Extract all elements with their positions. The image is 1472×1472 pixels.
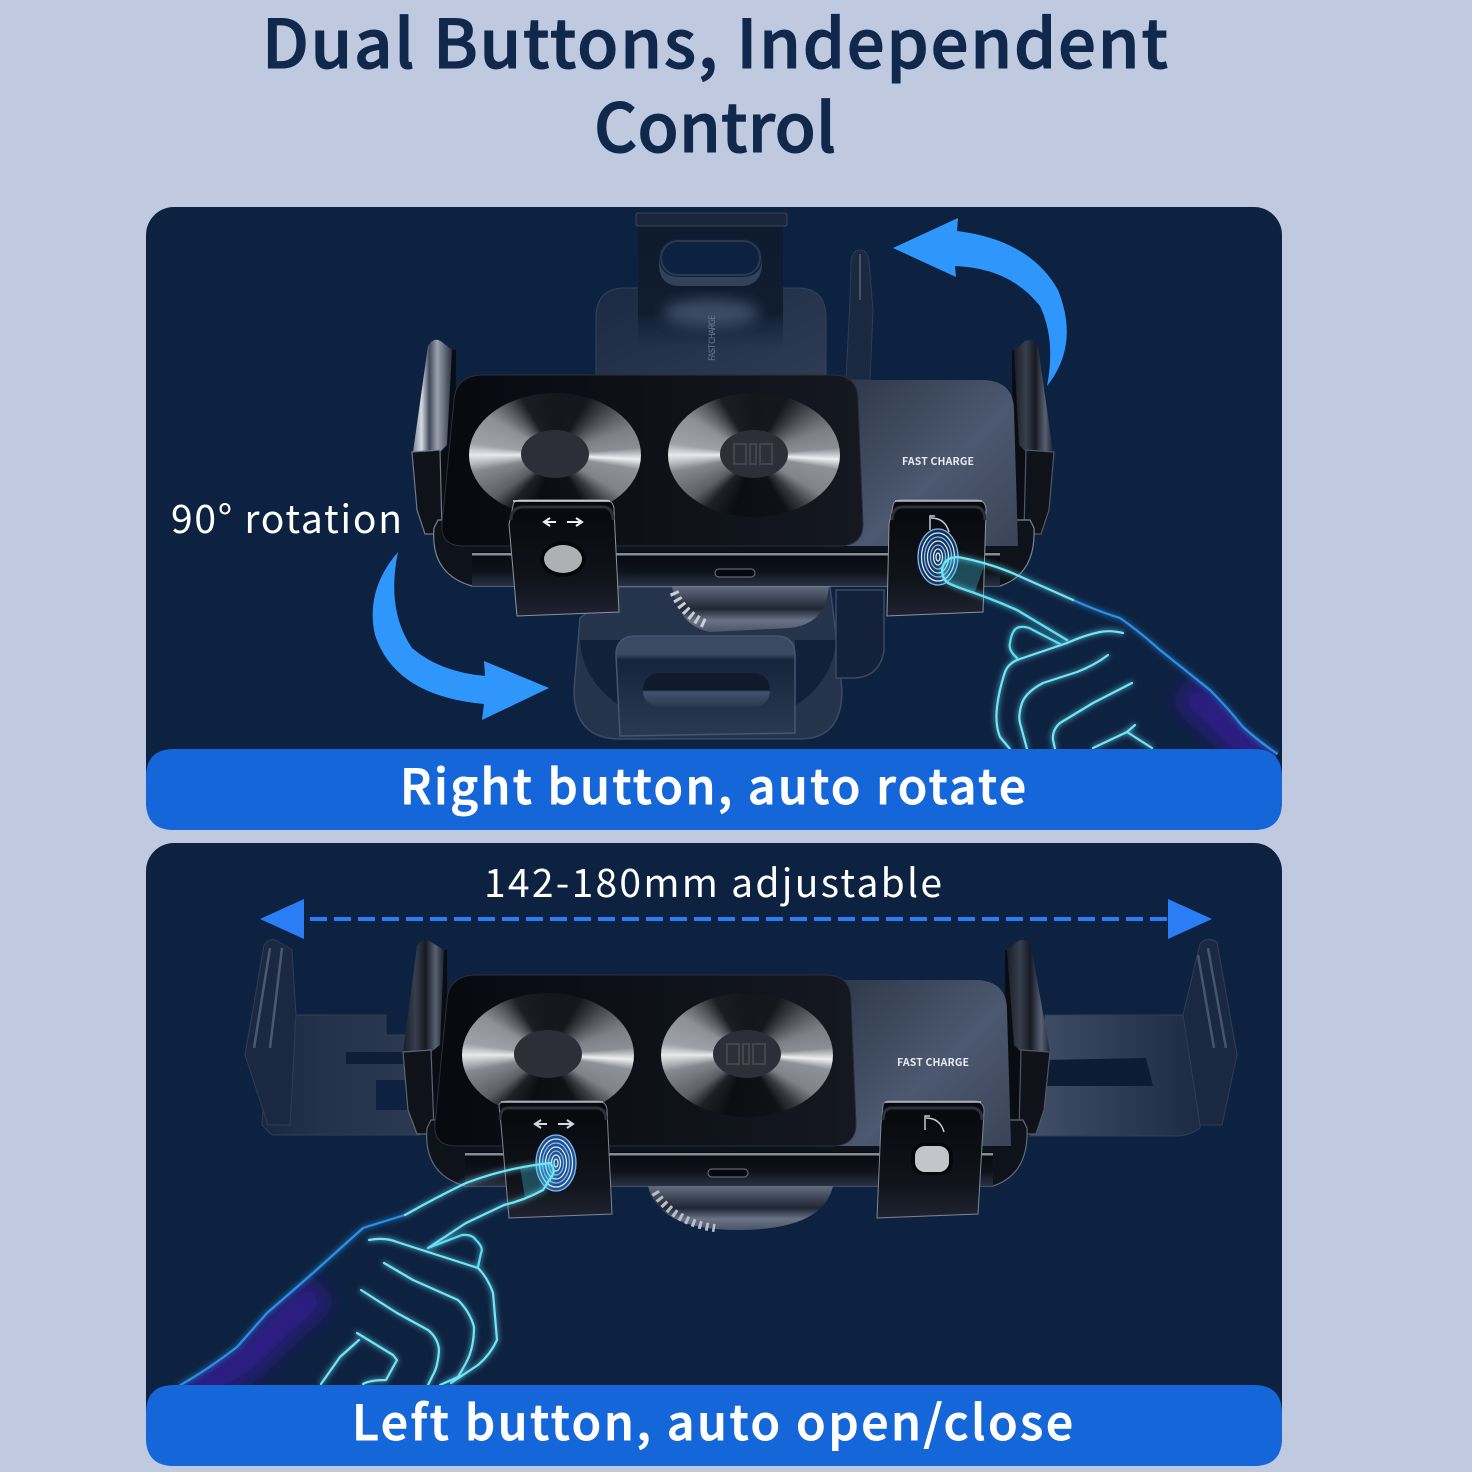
left clip with button — [509, 500, 619, 616]
gray wireless charging plate — [846, 380, 1018, 546]
lower carrier — [434, 520, 1034, 586]
left grip — [412, 340, 456, 535]
panel: left button, auto open/close — [146, 843, 1282, 1466]
neon hand pressing left button — [179, 1163, 554, 1396]
panel background — [146, 843, 1282, 1466]
caption bar: right button, auto rotate: Right button, auto rotate — [400, 748, 1026, 818]
icon: curved rotation arrow top right — [893, 218, 1067, 386]
right cooling disc — [661, 993, 833, 1117]
black phone plate — [442, 375, 863, 546]
left cooling disc — [469, 393, 641, 517]
title: Control — [594, 75, 836, 172]
dimension label: 142-180mm adjustable — [484, 853, 942, 909]
ghost arm fully extended left — [245, 940, 420, 1135]
icon: curved rotation arrow bottom left — [373, 552, 549, 720]
panel: right button, auto rotate — [146, 207, 1282, 830]
caption bar: left button, auto open/close — [146, 1384, 1282, 1466]
dashed double arrow — [260, 899, 1212, 939]
connecting bar — [472, 552, 1000, 586]
neon hand pressing right button — [942, 557, 1282, 772]
title — [262, 0, 1168, 172]
phone mount rotated 90 degrees — [412, 213, 1054, 739]
phone mount closed position — [403, 940, 1050, 1230]
ghost top clamp and rear plate — [596, 213, 873, 400]
right cooling disc — [668, 393, 840, 517]
right grip — [1005, 940, 1050, 1135]
ghost arm fully extended right — [1030, 939, 1237, 1136]
black phone plate — [435, 975, 856, 1146]
left cooling disc — [462, 993, 634, 1117]
fast charge label: FAST CHARGE — [897, 1055, 969, 1070]
caption bar: right button, auto rotate — [146, 748, 1282, 830]
ghost top clamp and rear plate: FAST CHARGE — [706, 315, 718, 361]
right clip with fingerprint — [887, 500, 986, 616]
left grip — [403, 940, 448, 1135]
panel background — [146, 207, 1282, 830]
mount knob — [648, 1186, 833, 1230]
connecting bar — [465, 1152, 993, 1186]
right clip with button — [877, 1101, 984, 1218]
lower carrier — [427, 1120, 1027, 1186]
left clip with fingerprint — [499, 1101, 612, 1218]
caption bar: left button, auto open/close: Left button, auto open/close — [352, 1384, 1073, 1454]
rear lower clamp — [574, 586, 884, 739]
fast charge label: FAST CHARGE — [902, 454, 974, 469]
gray wireless charging plate — [839, 980, 1011, 1146]
right grip — [1012, 340, 1054, 535]
label: 90 degree rotation: 90° rotation — [171, 489, 402, 545]
